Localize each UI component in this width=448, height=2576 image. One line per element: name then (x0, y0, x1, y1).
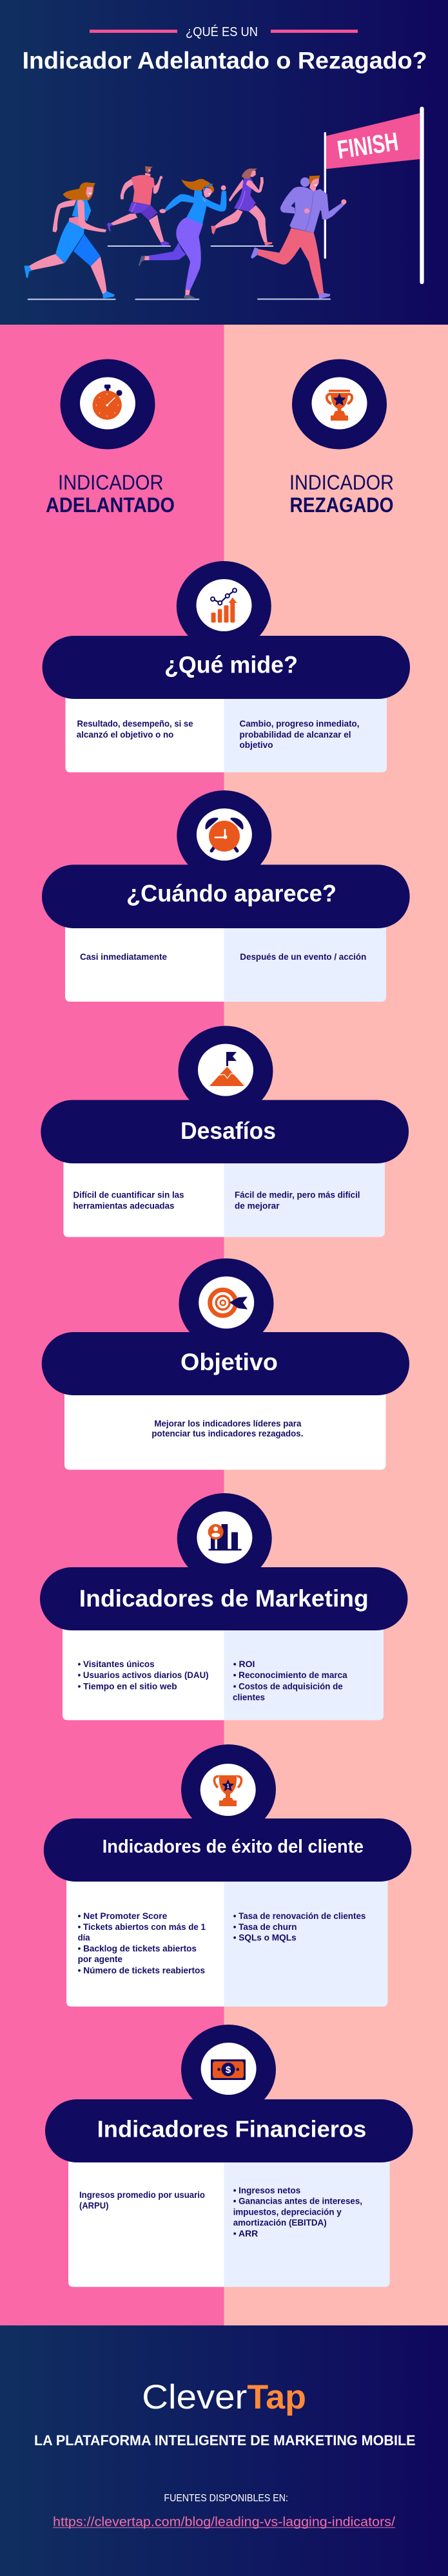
text: lagging (240, 718, 360, 750)
footer panel (0, 2325, 448, 2576)
panel: indicadores de éxito del cliente (44, 1744, 411, 2007)
label: indicador rezagado: INDICADOR (289, 471, 394, 494)
label: indicador rezagado: REZAGADO (290, 493, 393, 517)
tagline: LA PLATAFORMA INTELIGENTE DE MARKETING MOBILE (34, 2432, 415, 2448)
text: lagging: Cambio, progreso inmediato, (240, 718, 360, 729)
column header: indicador adelantado (46, 359, 175, 517)
background: right peach column (224, 325, 448, 2325)
column header: indicador rezagado (289, 359, 394, 517)
card: qué mide, lagging column (224, 692, 387, 772)
text: lagging (235, 1189, 360, 1210)
list: lagging: impuestos, depreciación y (233, 2207, 342, 2217)
card: financieros, lagging column (224, 2156, 390, 2287)
heading pill (42, 1332, 409, 1395)
list: lagging: • Ganancias antes de intereses, (233, 2195, 362, 2206)
panel: desafíos (41, 1026, 409, 1237)
list: lagging: • Reconocimiento de marca (233, 1670, 347, 1680)
icon badge: trophy (292, 359, 387, 450)
heading pill: Desafíos (180, 1118, 276, 1144)
icon badge: mountain flag (178, 1026, 273, 1116)
panel: qué mide (43, 561, 410, 772)
text: leading (77, 718, 193, 739)
heading pill: Indicadores de Marketing (79, 1585, 369, 1612)
card: marketing, lagging column (224, 1624, 384, 1720)
text: leading: Difícil de cuantificar sin las (73, 1189, 184, 1199)
list: lagging (233, 1911, 366, 1943)
text: lagging: Después de un evento / acción (240, 951, 366, 962)
title: Indicador Adelantado o Rezagado? (23, 48, 427, 74)
card: objetivo (64, 1389, 385, 1470)
list: leading: • Backlog de tickets abiertos (78, 1943, 197, 1954)
kicker rule right (271, 30, 358, 33)
panel: indicadores financieros (45, 2025, 413, 2287)
text: objetivo: potenciar tus indicadores rezagados. (151, 1428, 303, 1438)
list: lagging: • Ingresos netos (233, 2185, 301, 2195)
illustration: runner 3 and runner 4 (135, 169, 273, 300)
background: left pink column (0, 325, 224, 2325)
list: leading: • Net Promoter Score (78, 1911, 168, 1921)
list: lagging: • SQLs o MQLs (233, 1932, 297, 1943)
text: leading: alcanzó el objetivo o no (77, 729, 173, 739)
heading pill: ¿Qué mide? (164, 652, 298, 678)
list: lagging: • Tasa de churn (233, 1922, 297, 1932)
kicker rule left (90, 30, 177, 33)
card: financieros, leading column (68, 2156, 224, 2287)
heading pill: Indicadores de éxito del cliente (102, 1837, 364, 1857)
logo: CleverTap: Tap (247, 2378, 306, 2416)
icon badge: audience bars (177, 1493, 272, 1583)
list: lagging (233, 1659, 347, 1702)
list: lagging: • Tasa de renovación de clientes (233, 1911, 366, 1921)
icon badge: alarm clock (177, 790, 271, 881)
icon badge: target (179, 1259, 273, 1349)
label: indicador rezagado (289, 471, 394, 517)
list: lagging: clientes (233, 1692, 265, 1702)
card: desafíos, lagging column (224, 1157, 385, 1237)
list: leading: • Tickets abiertos con más de 1 (78, 1922, 206, 1932)
text: lagging: probabilidad de alcanzar el (240, 729, 351, 739)
heading pill: Objetivo (180, 1349, 278, 1375)
icon badge: trophy number one: 1 (226, 1783, 229, 1789)
icon badge: trophy number one (181, 1744, 276, 1835)
logo: CleverTap (142, 2378, 306, 2416)
label: indicador adelantado: ADELANTADO (46, 493, 175, 517)
text: leading (79, 2190, 205, 2211)
list: lagging: • ROI (233, 1659, 255, 1669)
illustration: runner 5 (251, 175, 346, 300)
icon badge: banknote: $ (226, 2065, 231, 2075)
kicker text: ¿QUÉ ES UN (186, 24, 258, 39)
label: indicador adelantado (46, 471, 175, 517)
header panel (0, 0, 448, 325)
logo: CleverTap: Clever (142, 2378, 247, 2416)
heading pill (42, 864, 410, 928)
panel: cuándo aparece (42, 790, 410, 1002)
list: leading: • Número de tickets reabiertos (78, 1965, 205, 1975)
list: leading: • Visitantes únicos (78, 1659, 155, 1669)
card: qué mide, leading column (66, 692, 224, 772)
text: leading: Resultado, desempeño, si se (77, 718, 193, 729)
list: lagging: amortización (EBITDA) (233, 2217, 327, 2228)
finish label: FINISH (335, 128, 400, 164)
list: leading: • Tiempo en el sitio web (78, 1681, 177, 1691)
heading pill (41, 1100, 409, 1163)
heading pill (45, 2099, 413, 2162)
list: leading (78, 1659, 209, 1691)
text: lagging: Fácil de medir, pero más difícil (235, 1189, 360, 1199)
panel: indicadores de marketing (40, 1493, 407, 1720)
illustration: finish banner (324, 107, 424, 284)
list: lagging: • Costos de adquisición de (233, 1681, 343, 1691)
text: leading: Casi inmediatamente (80, 951, 167, 962)
text: objetivo: Mejorar los indicadores líderes para (154, 1418, 302, 1428)
icon badge: stopwatch (61, 359, 155, 450)
heading pill (43, 636, 410, 699)
label: indicador adelantado: INDICADOR (58, 471, 164, 494)
card: cuándo, leading column (65, 922, 224, 1002)
card: éxito, leading column (66, 1875, 224, 2007)
card: éxito, lagging column (224, 1875, 388, 2007)
list: lagging: • ARR (233, 2228, 258, 2238)
text: leading (73, 1189, 184, 1210)
list: leading: • Usuarios activos diarios (DAU) (78, 1670, 209, 1680)
heading pill: Indicadores Financieros (97, 2115, 366, 2142)
icon badge: banknote (181, 2025, 276, 2115)
heading pill (44, 1818, 411, 1882)
panel: objetivo (42, 1259, 409, 1470)
text: lagging: de mejorar (235, 1200, 280, 1210)
heading pill: ¿Cuándo aparece? (126, 880, 336, 907)
list: leading (78, 1911, 206, 1975)
list: lagging (233, 2185, 362, 2238)
list: leading: día (78, 1932, 90, 1943)
illustration: runner 1 and runner 2 (24, 166, 171, 300)
sources label: FUENTES DISPONIBLES EN: (164, 2493, 288, 2504)
text: leading: (ARPU) (79, 2200, 108, 2211)
card: marketing, leading column (63, 1624, 224, 1720)
heading pill (40, 1567, 407, 1630)
card: cuándo, lagging column (224, 922, 386, 1002)
list: leading: por agente (78, 1954, 122, 1964)
text: lagging: objetivo (240, 739, 273, 750)
text: leading: herramientas adecuadas (73, 1200, 175, 1210)
text: leading: Ingresos promedio por usuario (79, 2190, 205, 2200)
card: desafíos, leading column (63, 1157, 224, 1237)
text: objetivo (151, 1418, 303, 1438)
sources link: https://clevertap.com/blog/leading-vs-lagging-indicators/ (53, 2515, 395, 2529)
icon badge: growth chart (177, 561, 271, 651)
